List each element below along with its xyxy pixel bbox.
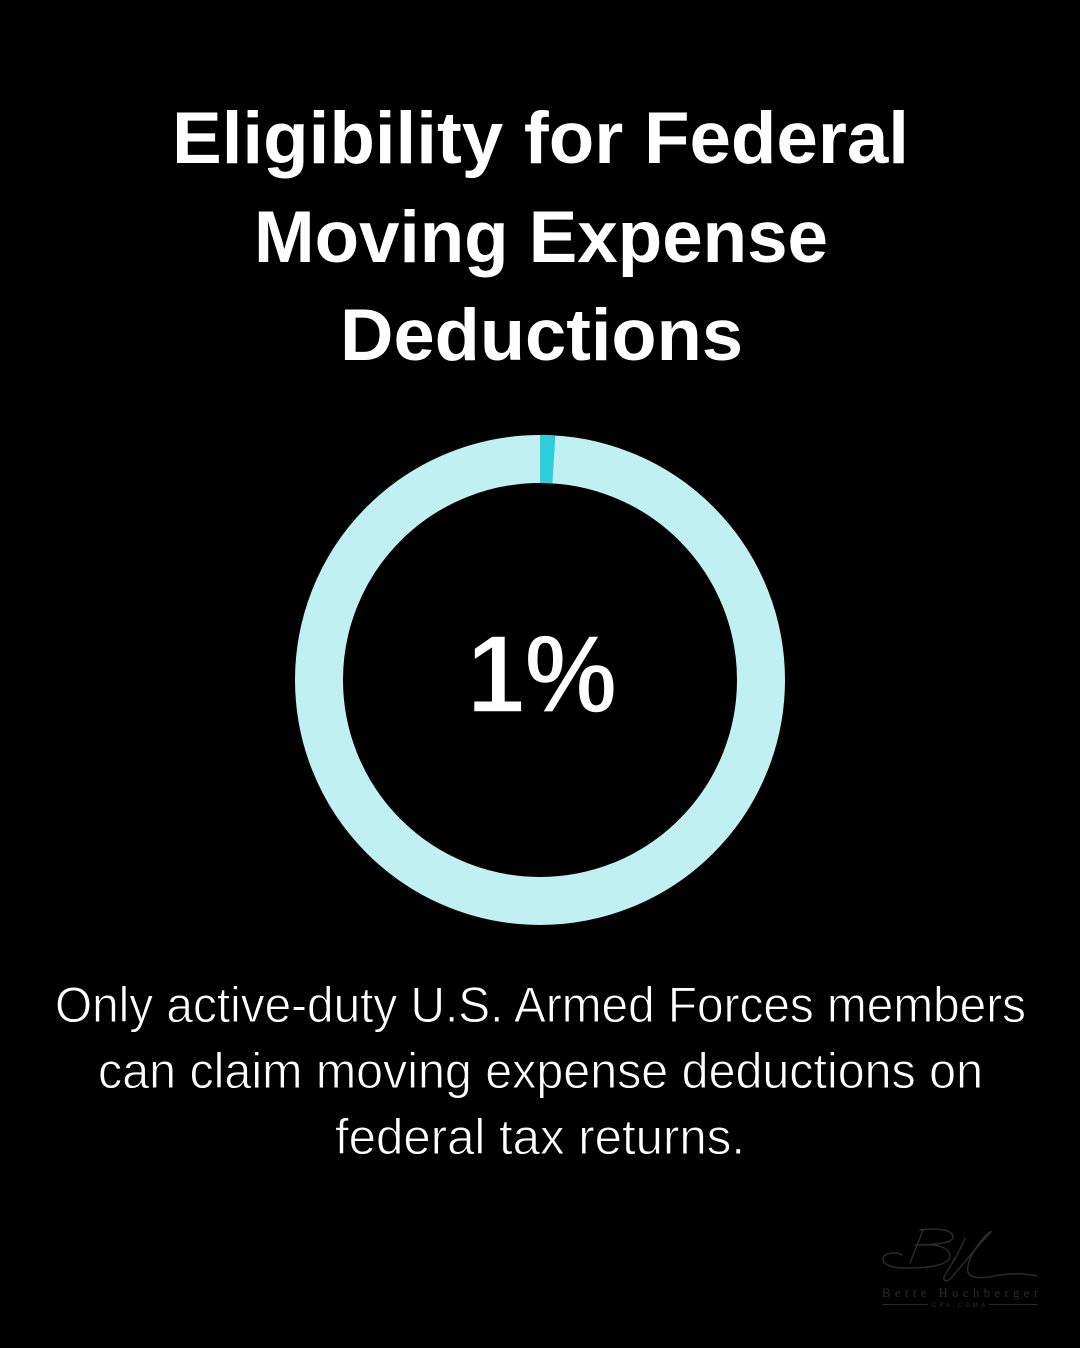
logo rule left xyxy=(882,1304,928,1305)
title: Deductions xyxy=(340,295,743,376)
donut remainder ring xyxy=(319,459,761,901)
description text: can claim moving expense deductions on xyxy=(98,1043,983,1099)
description text xyxy=(55,977,1026,1165)
description text: Only active-duty U.S. Armed Forces members xyxy=(55,977,1026,1033)
donut chart: 1% xyxy=(319,435,761,901)
center value: 1% xyxy=(467,613,617,736)
signature mark xyxy=(883,1229,1037,1281)
title: Eligibility for Federal xyxy=(172,98,909,179)
logo credentials: CPA,CGMA xyxy=(932,1303,985,1309)
title: Moving Expense xyxy=(254,197,828,278)
donut highlighted 1% segment xyxy=(540,435,555,483)
logo rule right xyxy=(989,1304,1038,1305)
description text: federal tax returns. xyxy=(335,1109,745,1165)
title xyxy=(172,98,909,376)
logo: Bette Hochberger signature xyxy=(882,1229,1039,1309)
logo name: Bette Hochberger xyxy=(882,1286,1039,1300)
